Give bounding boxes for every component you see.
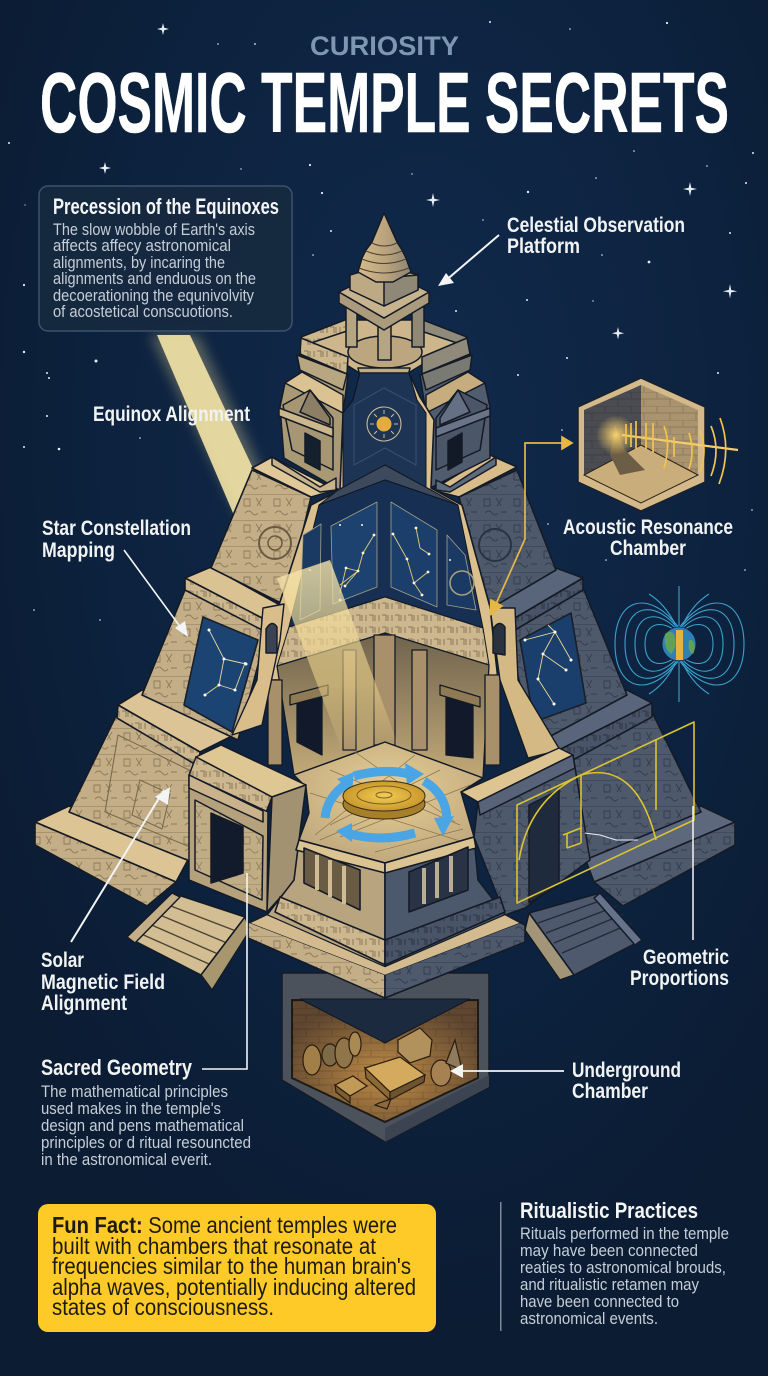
interior carved frieze [277, 597, 489, 666]
earth globe [662, 627, 696, 661]
carved figure panel [105, 735, 193, 847]
fun fact box [38, 1204, 436, 1332]
callout: star constellation mapping: Star Constellation [42, 517, 191, 540]
ritualistic practices section: Ritualistic Practices [520, 1198, 698, 1223]
callout: geometric proportions: Geometric [643, 946, 729, 969]
fun fact box: frequencies similar to the human brain's [52, 1253, 411, 1279]
balcony columns [346, 307, 424, 360]
rotation arrows [325, 771, 447, 838]
right entrance block [461, 748, 590, 915]
underground ceiling block [300, 999, 470, 1043]
left entrance block [189, 745, 306, 912]
starfield [8, 21, 754, 621]
callout: geometric proportions: Proportions [630, 967, 729, 990]
left doorway opening [211, 813, 243, 883]
callout: sacred geometry: in the astronomical everit. [41, 1150, 212, 1169]
second tier walls [211, 455, 556, 610]
kicker: curiosity: CURIOSITY [310, 31, 459, 61]
interior frieze under sun room [319, 465, 458, 505]
underground artifacts [303, 1028, 462, 1109]
callout: solar magnetic field alignment [41, 787, 170, 1015]
right balcony window [409, 847, 468, 912]
ritualistic practices section: may have been connected [520, 1241, 698, 1260]
temple [35, 213, 735, 998]
third tier walls with constellation windows [142, 567, 627, 745]
callout: solar magnetic field alignment: Magnetic Field [41, 971, 165, 994]
ritualistic practices section: Rituals performed in the temple [520, 1224, 729, 1243]
fun fact box: Fun Fact: Some ancient temples were [52, 1212, 397, 1238]
callout: celestial observation platform: Platform [507, 235, 580, 258]
callout: solar magnetic field alignment: Solar [41, 949, 84, 972]
golden ratio overlay [517, 722, 694, 903]
callout: acoustic resonance chamber: Chamber [610, 537, 686, 560]
right constellation [393, 528, 429, 595]
platform base tier [35, 806, 735, 906]
inner light beam [277, 560, 400, 750]
lower hall walls [268, 633, 500, 778]
panel: precession of the equinoxes: affects affecy astronomical [53, 236, 231, 255]
callout: sacred geometry [41, 873, 251, 1169]
left stairs [127, 893, 250, 990]
balcony floor and parapets [297, 307, 472, 390]
ritualistic practices section: reaties to astronomical brouds, [520, 1258, 726, 1277]
left sky window [184, 617, 258, 732]
callout: acoustic resonance chamber: Acoustic Resonance [563, 516, 733, 539]
upper tower left side [280, 355, 348, 492]
left doorway [297, 692, 322, 755]
callout: celestial observation platform [438, 214, 685, 286]
ritualistic practices section: astronomical events. [520, 1309, 658, 1328]
right stairs [525, 893, 642, 980]
upper sun room [343, 373, 426, 490]
constellation room [289, 480, 483, 628]
room stars [309, 524, 451, 601]
callout: acoustic resonance chamber [563, 516, 733, 560]
callout: underground chamber [450, 1059, 681, 1103]
crack [585, 833, 638, 840]
observation tower [272, 213, 496, 492]
right doorway opening [529, 790, 559, 903]
central medallion with rotation arrows [325, 763, 454, 842]
right doorway [446, 692, 473, 758]
callout: sacred geometry: The mathematical principles [41, 1082, 228, 1101]
fun fact box: built with chambers that resonate at [52, 1233, 377, 1259]
panel: precession of the equinoxes: alignments and enduous on the [53, 269, 256, 288]
callout: sacred geometry: used makes in the temple's [41, 1099, 221, 1118]
lower ledge [248, 915, 525, 998]
callout: celestial observation platform: Celestial Observation [507, 214, 685, 237]
upper tower right side [420, 355, 490, 490]
panel: precession of the equinoxes: Precession of the Equinoxes [53, 194, 279, 219]
left balcony window [304, 848, 360, 910]
right sky window [520, 613, 586, 722]
interior cutaway frame [265, 373, 498, 680]
hall columns [268, 635, 500, 765]
right shrine [436, 390, 496, 492]
panel: precession of the equinoxes: of acostetical conscuotions. [53, 302, 233, 321]
left shrine [272, 390, 336, 492]
panel: precession of the equinoxes [39, 186, 292, 331]
gold disc [343, 781, 425, 819]
ritualistic practices section: and ritualistic retamen may [520, 1275, 699, 1294]
callout: underground chamber: Chamber [572, 1080, 648, 1103]
spire [339, 213, 429, 330]
panel: precession of the equinoxes: decoerationing the equnivolvity [53, 286, 254, 305]
fun fact box: alpha waves, potentially inducing altered [52, 1274, 416, 1300]
sun emblem [367, 407, 401, 441]
callout: sacred geometry: principles or d ritual resouncted [41, 1133, 251, 1152]
callout: geometric proportions [630, 806, 729, 990]
callout: equinox alignment: Equinox Alignment [93, 403, 250, 426]
callout: underground chamber: Underground [572, 1059, 681, 1082]
callout: star constellation mapping: Mapping [42, 539, 115, 562]
callout: solar magnetic field alignment: Alignment [41, 992, 127, 1015]
callout: star constellation mapping [42, 517, 191, 637]
ritualistic practices section [500, 1198, 729, 1331]
hall floor [294, 742, 483, 863]
tan pillars with arched niches [232, 604, 560, 758]
panel: precession of the equinoxes: alignments, by incaring the [53, 253, 225, 272]
heading group [40, 31, 729, 151]
underground chamber [282, 973, 489, 1142]
panel: precession of the equinoxes: The slow wobble of Earth's axis [53, 220, 255, 239]
outer light beam: equinox alignment [150, 335, 270, 525]
central block front faces [267, 837, 505, 967]
callout: sacred geometry: Sacred Geometry [41, 1055, 193, 1080]
acoustic resonance chamber inset [578, 378, 738, 511]
fourth tier walls [69, 690, 701, 862]
fun fact box: states of consciousness. [52, 1294, 274, 1320]
ritualistic practices section: have been connected to [520, 1292, 679, 1311]
sound waves [596, 415, 738, 484]
magnetic field diagram [615, 586, 744, 702]
acoustic arrow [490, 437, 572, 615]
callout: sacred geometry: design and pens mathematical [41, 1116, 244, 1135]
left constellation [340, 535, 374, 593]
